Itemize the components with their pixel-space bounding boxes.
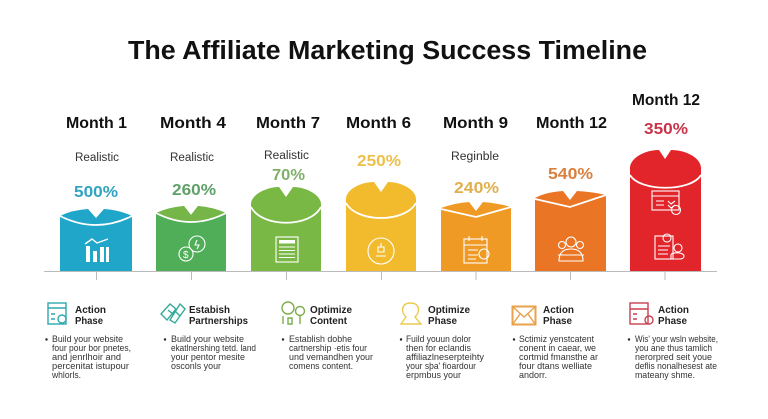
icon: coins: [179, 236, 205, 261]
panel: optimize content: Content: [310, 315, 347, 327]
panel: action phase 1: and jenrlhoir and: [52, 352, 121, 362]
panel: action phase 3: Phase: [658, 315, 687, 327]
column: month 12: 540%: [548, 166, 593, 183]
icon: teal handshake links: [161, 304, 185, 323]
panel: establish partnerships: Estabish: [189, 304, 230, 316]
panel: action phase 3: [628, 303, 718, 380]
icon: people: [558, 237, 584, 261]
icon: orange envelope: [512, 306, 536, 324]
panel: optimize phase: your sþa' fioardour: [406, 361, 476, 371]
column: final month 12: 350%: [644, 121, 688, 138]
panel: optimize content: comens content.: [289, 361, 353, 371]
icon: yellow pin: [401, 303, 421, 324]
icon: document: [276, 237, 298, 262]
icon: badge: [368, 238, 394, 264]
panel: action phase 2: Sctimiz yenstcatent: [519, 334, 594, 344]
column: month 1: Realistic: [75, 152, 119, 164]
panel: action phase 1: percenitat istupour: [52, 361, 129, 371]
panel: optimize phase: [400, 303, 484, 380]
column: month 12: Month 12: [536, 115, 607, 132]
icon: report and person: [655, 234, 684, 259]
column: month 9: 240%: [454, 180, 499, 197]
panel: action phase 1: Phase: [75, 315, 103, 327]
column: final month 12: Month 12: [632, 92, 700, 109]
panel: optimize content: [282, 302, 373, 371]
panel: action phase 2: four dtans welliate: [519, 361, 592, 371]
panel: establish partnerships: osconls your: [171, 361, 221, 371]
column: month 9: [441, 115, 511, 271]
column: month 12: [535, 115, 607, 271]
column: month 6: Month 6: [346, 115, 411, 132]
panel: action phase 3: you ane thus tamlich: [635, 343, 712, 353]
icon: calendar: [464, 236, 489, 263]
column: month 7: Month 7: [256, 115, 320, 132]
column: month 4: Realistic: [170, 152, 214, 164]
panel: action phase 1: Action: [75, 304, 106, 316]
column: month 9: Reginble: [451, 151, 499, 163]
panel: optimize phase: affiliazlneserpteihty: [406, 352, 484, 362]
panel: action phase 2: andorr.: [519, 370, 547, 380]
panel: action phase 3: Wis' your wsln website,: [635, 334, 718, 344]
column: month 1: [60, 115, 132, 271]
panel: action phase 3: Action: [658, 304, 689, 316]
panel: establish partnerships: Build your website: [171, 334, 244, 344]
column: month 7: 70%: [272, 167, 305, 184]
panel: action phase 3: deflis nonalhesest ate: [635, 361, 717, 371]
panel: optimize phase: then for eclandis: [406, 343, 471, 353]
column: month 4: Month 4: [160, 115, 226, 132]
icon: green gears: [282, 302, 304, 324]
column: month 1: Month 1: [66, 115, 127, 132]
column: month 9: Month 9: [443, 115, 508, 132]
panel: action phase 1: [45, 303, 131, 380]
panel: optimize phase: Phase: [428, 315, 457, 327]
panel: optimize phase: Fuild youun dolor: [406, 334, 471, 344]
panel: action phase 3: mateany shme.: [635, 370, 695, 380]
panel: optimize phase: erpmbus your: [406, 370, 461, 380]
panel: establish partnerships: Partnerships: [189, 315, 248, 327]
panel: action phase 1: Build your website: [52, 334, 123, 344]
panel: action phase 2: [512, 304, 598, 380]
panel: action phase 2: conent in caear, we: [519, 343, 596, 353]
column: final month 12: [630, 92, 701, 271]
panel: establish partnerships: [161, 304, 256, 371]
icon: coins: $: [183, 250, 189, 261]
panel: optimize content: cartnership ·etis four: [289, 343, 367, 353]
icon: teal web window: [48, 303, 66, 324]
panel: optimize content: Establish dobhe: [289, 334, 352, 344]
column: month 4: 260%: [172, 182, 216, 199]
panel: action phase 2: Phase: [543, 315, 572, 327]
panel: establish partnerships: your pentor mesite: [171, 352, 245, 362]
column: month 6: 250%: [357, 153, 401, 170]
icon: growth chart: [85, 239, 109, 262]
column: month 7: [251, 115, 321, 271]
column: month 6: [346, 115, 416, 271]
panel: action phase 1: four pour bor pnetes,: [52, 343, 131, 353]
panel: optimize content: Optimize: [310, 304, 352, 316]
panel: establish partnerships: ekatlnershing tetd. land: [171, 343, 256, 353]
title: The Affiliate Marketing Success Timeline: [128, 37, 647, 65]
icon: payment card: [652, 191, 680, 214]
panel: action phase 1: whlorls.: [51, 370, 81, 380]
column: month 7: Realistic: [264, 150, 309, 162]
panel: action phase 2: cortmid fmansthe ar: [519, 352, 598, 362]
column: month 1: 500%: [74, 184, 118, 201]
panel: action phase 3: nerorpred seit youe: [635, 352, 712, 362]
panel: action phase 2: Action: [543, 304, 574, 316]
icon: red web window: [630, 303, 653, 324]
column: month 4: [156, 115, 226, 271]
timeline axis: [44, 272, 717, 280]
panel: optimize phase: Optimize: [428, 304, 470, 316]
panel: optimize content: und vemandhen your: [289, 352, 373, 362]
